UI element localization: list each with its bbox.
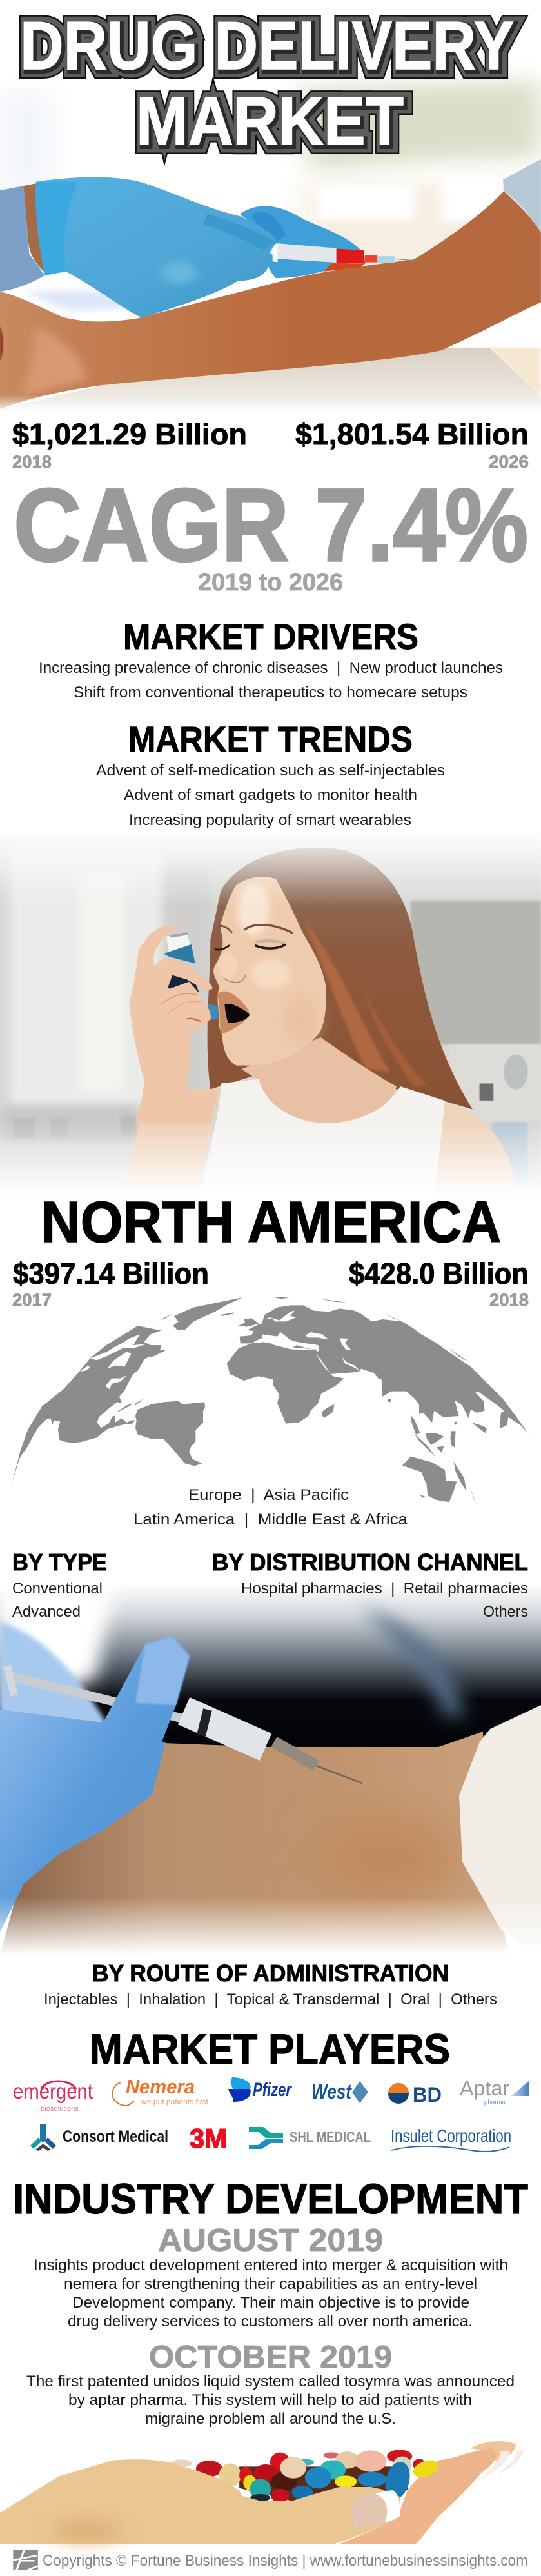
by type: Advanced bbox=[12, 1603, 81, 1621]
logo: 3M: 3M bbox=[190, 2123, 227, 2153]
blurred clinic background bbox=[0, 80, 541, 310]
by distribution channel: BY DISTRIBUTION CHANNEL bbox=[212, 1549, 528, 1575]
market trends text bbox=[96, 762, 445, 829]
market drivers text bbox=[39, 659, 503, 701]
arm bbox=[0, 191, 541, 409]
logo: Nemera: Nemera bbox=[126, 2075, 195, 2098]
market size 2018: 2018 bbox=[12, 452, 52, 472]
logo: Consort Medical bbox=[30, 2124, 168, 2151]
North America lakes and bays bbox=[80, 1334, 150, 1389]
room background bbox=[0, 830, 541, 1197]
arm bbox=[0, 1732, 509, 1955]
logo: Aptar: pharma bbox=[484, 2099, 506, 2106]
by route of administration: Injectables | Inhalation | Topical & Transdermal | Oral | Others bbox=[44, 1991, 497, 2008]
North America 2017 value bbox=[12, 1257, 209, 1310]
logo: Pfizer bbox=[228, 2077, 293, 2102]
August 2019 text: nemera for strengthening their capabilities as an entry-level bbox=[64, 2275, 477, 2293]
market drivers text: Increasing prevalence of chronic diseases | New product launches bbox=[39, 659, 503, 677]
logo: emergent: emergent bbox=[13, 2079, 93, 2103]
photo: woman using an inhaler bbox=[0, 829, 541, 1202]
by route of administration: BY ROUTE OF ADMINISTRATION bbox=[92, 1960, 449, 1986]
eyes and brows bbox=[215, 925, 292, 950]
photo: hand holding colourful pills bbox=[0, 2441, 524, 2544]
market size 2018 bbox=[12, 417, 247, 472]
North America 2017 value: $397.14 Billion bbox=[13, 1257, 209, 1290]
logo: West: West bbox=[311, 2080, 352, 2103]
North America 2018 value bbox=[349, 1257, 529, 1310]
Australia bbox=[402, 1457, 457, 1502]
logo: Nemera: we put patients first bbox=[141, 2097, 208, 2106]
October 2019 text: The first patented unidos liquid system called tosymra was announced bbox=[26, 2373, 515, 2390]
photo: gloved hands giving an injection bbox=[0, 80, 541, 419]
title line 2: MARKET bbox=[139, 85, 406, 161]
Africa bbox=[262, 1342, 344, 1424]
title line 2: MARKET bbox=[136, 83, 404, 159]
market drivers text: Shift from conventional therapeutics to homecare setups bbox=[74, 684, 467, 701]
by type: Conventional bbox=[12, 1580, 103, 1597]
left glove bbox=[35, 177, 277, 317]
Sri Lanka bbox=[388, 1399, 391, 1402]
world map bbox=[12, 1297, 529, 1505]
market size 2026 bbox=[295, 417, 529, 472]
Iceland bbox=[219, 1312, 234, 1316]
Tasmania bbox=[420, 1495, 426, 1498]
glove highlights bbox=[35, 182, 276, 283]
blue glove bbox=[0, 1636, 190, 1932]
photo fades bbox=[0, 829, 541, 1202]
logo: Pfizer: Pfizer bbox=[253, 2079, 293, 2101]
logo: Insulet Corporation: Insulet Corporation bbox=[391, 2126, 511, 2146]
white sleeve bbox=[459, 1705, 541, 1959]
right glove bbox=[240, 206, 365, 278]
palm and thumb bbox=[0, 2459, 401, 2544]
Japan bbox=[472, 1423, 487, 1433]
logo: emergent bbox=[13, 2079, 93, 2113]
table surface bbox=[0, 348, 541, 419]
October 2019 heading: OCTOBER 2019 bbox=[149, 2340, 392, 2375]
left sleeve bbox=[0, 186, 45, 292]
by type: BY TYPE bbox=[12, 1549, 107, 1575]
Caribbean islands bbox=[117, 1399, 143, 1412]
October 2019 text bbox=[26, 2373, 515, 2428]
logo: Consort Medical: Consort Medical bbox=[63, 2128, 168, 2146]
Southeast Asia islands bbox=[411, 1415, 476, 1505]
British Isles bbox=[239, 1318, 259, 1327]
by type bbox=[12, 1549, 107, 1621]
hair highlights bbox=[304, 919, 428, 1086]
right shoulder bbox=[435, 1102, 517, 1196]
Eastern hemisphere bbox=[262, 1297, 529, 1505]
North America bbox=[12, 1326, 166, 1484]
footer logo bbox=[13, 2550, 38, 2570]
thumbnail bbox=[351, 2490, 400, 2528]
hand bbox=[130, 926, 219, 1123]
western Europe bbox=[240, 1321, 273, 1343]
by distribution channel bbox=[212, 1549, 528, 1621]
by distribution channel: Others bbox=[483, 1603, 528, 1621]
hero fade into white bbox=[0, 395, 541, 427]
logo: SHL Medical: SHL MEDICAL bbox=[290, 2129, 371, 2145]
South America bbox=[135, 1401, 205, 1466]
neck bbox=[241, 1037, 397, 1124]
market size 2026: $1,801.54 Billion bbox=[295, 417, 529, 451]
October 2019 text: migraine problem all around the u.S. bbox=[145, 2410, 396, 2428]
CAGR period: 2019 to 2026 bbox=[198, 569, 343, 596]
pale glove behind syringe bbox=[0, 1622, 129, 1806]
market players heading: MARKET PLAYERS bbox=[90, 2025, 450, 2073]
by route of administration bbox=[44, 1960, 497, 2008]
other regions: Europe | Asia Pacific bbox=[188, 1486, 349, 1504]
North America 2018 value: 2018 bbox=[489, 1290, 529, 1310]
North America 2018 value: $428.0 Billion bbox=[349, 1257, 529, 1290]
market size 2018: $1,021.29 Billion bbox=[12, 417, 247, 451]
logo: Aptar: Aptar bbox=[460, 2077, 509, 2100]
North America 2017 value: 2017 bbox=[12, 1290, 52, 1310]
Greenland bbox=[159, 1297, 243, 1330]
western Africa bbox=[227, 1341, 273, 1381]
by distribution channel: Hospital pharmacies | Retail pharmacies bbox=[241, 1580, 528, 1597]
logo: Nemera bbox=[112, 2075, 208, 2106]
bottom fade bbox=[0, 1897, 541, 1962]
right sleeve bbox=[503, 159, 541, 233]
Madagascar bbox=[322, 1404, 334, 1418]
logo: SHL Medical bbox=[249, 2127, 371, 2149]
other regions bbox=[133, 1486, 408, 1528]
mouth bbox=[217, 991, 250, 1034]
Eurasia bbox=[262, 1305, 529, 1434]
logo: emergent: biosolutions bbox=[41, 2105, 79, 2113]
logo: Insulet Corporation bbox=[391, 2126, 511, 2152]
syringe bbox=[7, 1666, 362, 1783]
logo: BD: BD bbox=[413, 2083, 442, 2106]
dark blurred background bbox=[0, 1584, 541, 1755]
fingers bbox=[339, 2441, 524, 2544]
face, hand and inhaler bbox=[130, 877, 326, 1123]
wrist bbox=[23, 183, 45, 273]
Asian seas cut out bbox=[262, 1311, 360, 1379]
market trends text: Advent of smart gadgets to monitor health bbox=[124, 786, 417, 804]
October 2019 text: by aptar pharma. This system will help to aid patients with bbox=[68, 2391, 472, 2409]
August 2019 text: Insights product development entered into merger & acquisition with bbox=[34, 2257, 508, 2274]
hair bbox=[208, 848, 473, 1110]
August 2019 heading: AUGUST 2019 bbox=[158, 2223, 383, 2258]
August 2019 text: drug delivery services to customers all over north america. bbox=[68, 2313, 473, 2330]
other regions: Latin America | Middle East & Africa bbox=[133, 1511, 408, 1528]
pills bbox=[171, 2450, 442, 2502]
Arctic islands bbox=[274, 1297, 469, 1362]
Americas and western Europe bbox=[12, 1297, 273, 1484]
August 2019 text bbox=[34, 2257, 508, 2330]
room, hair and body bbox=[0, 830, 541, 1197]
market trends text: Advent of self-medication such as self-injectables bbox=[96, 762, 445, 779]
title line 2: MARKET bbox=[138, 85, 406, 161]
title line 2: MARKET bbox=[139, 85, 406, 161]
market trends text: Increasing popularity of smart wearables bbox=[129, 812, 411, 829]
market trends heading: MARKET TRENDS bbox=[128, 719, 413, 759]
photo: syringe injection into arm bbox=[0, 1574, 541, 1962]
left arm bbox=[121, 1078, 221, 1196]
market drivers heading: MARKET DRIVERS bbox=[123, 616, 418, 657]
North America heading: NORTH AMERICA bbox=[41, 1190, 501, 1255]
title bbox=[20, 8, 516, 161]
syringe bbox=[262, 243, 416, 272]
logo: Aptar bbox=[460, 2077, 529, 2106]
white top bbox=[200, 1079, 445, 1196]
logo: BD bbox=[388, 2083, 442, 2106]
August 2019 text: Development company. Their main objective is to provide bbox=[72, 2294, 469, 2311]
market size 2026: 2026 bbox=[489, 452, 529, 472]
inhaler bbox=[163, 932, 218, 1020]
face bbox=[213, 877, 326, 1066]
